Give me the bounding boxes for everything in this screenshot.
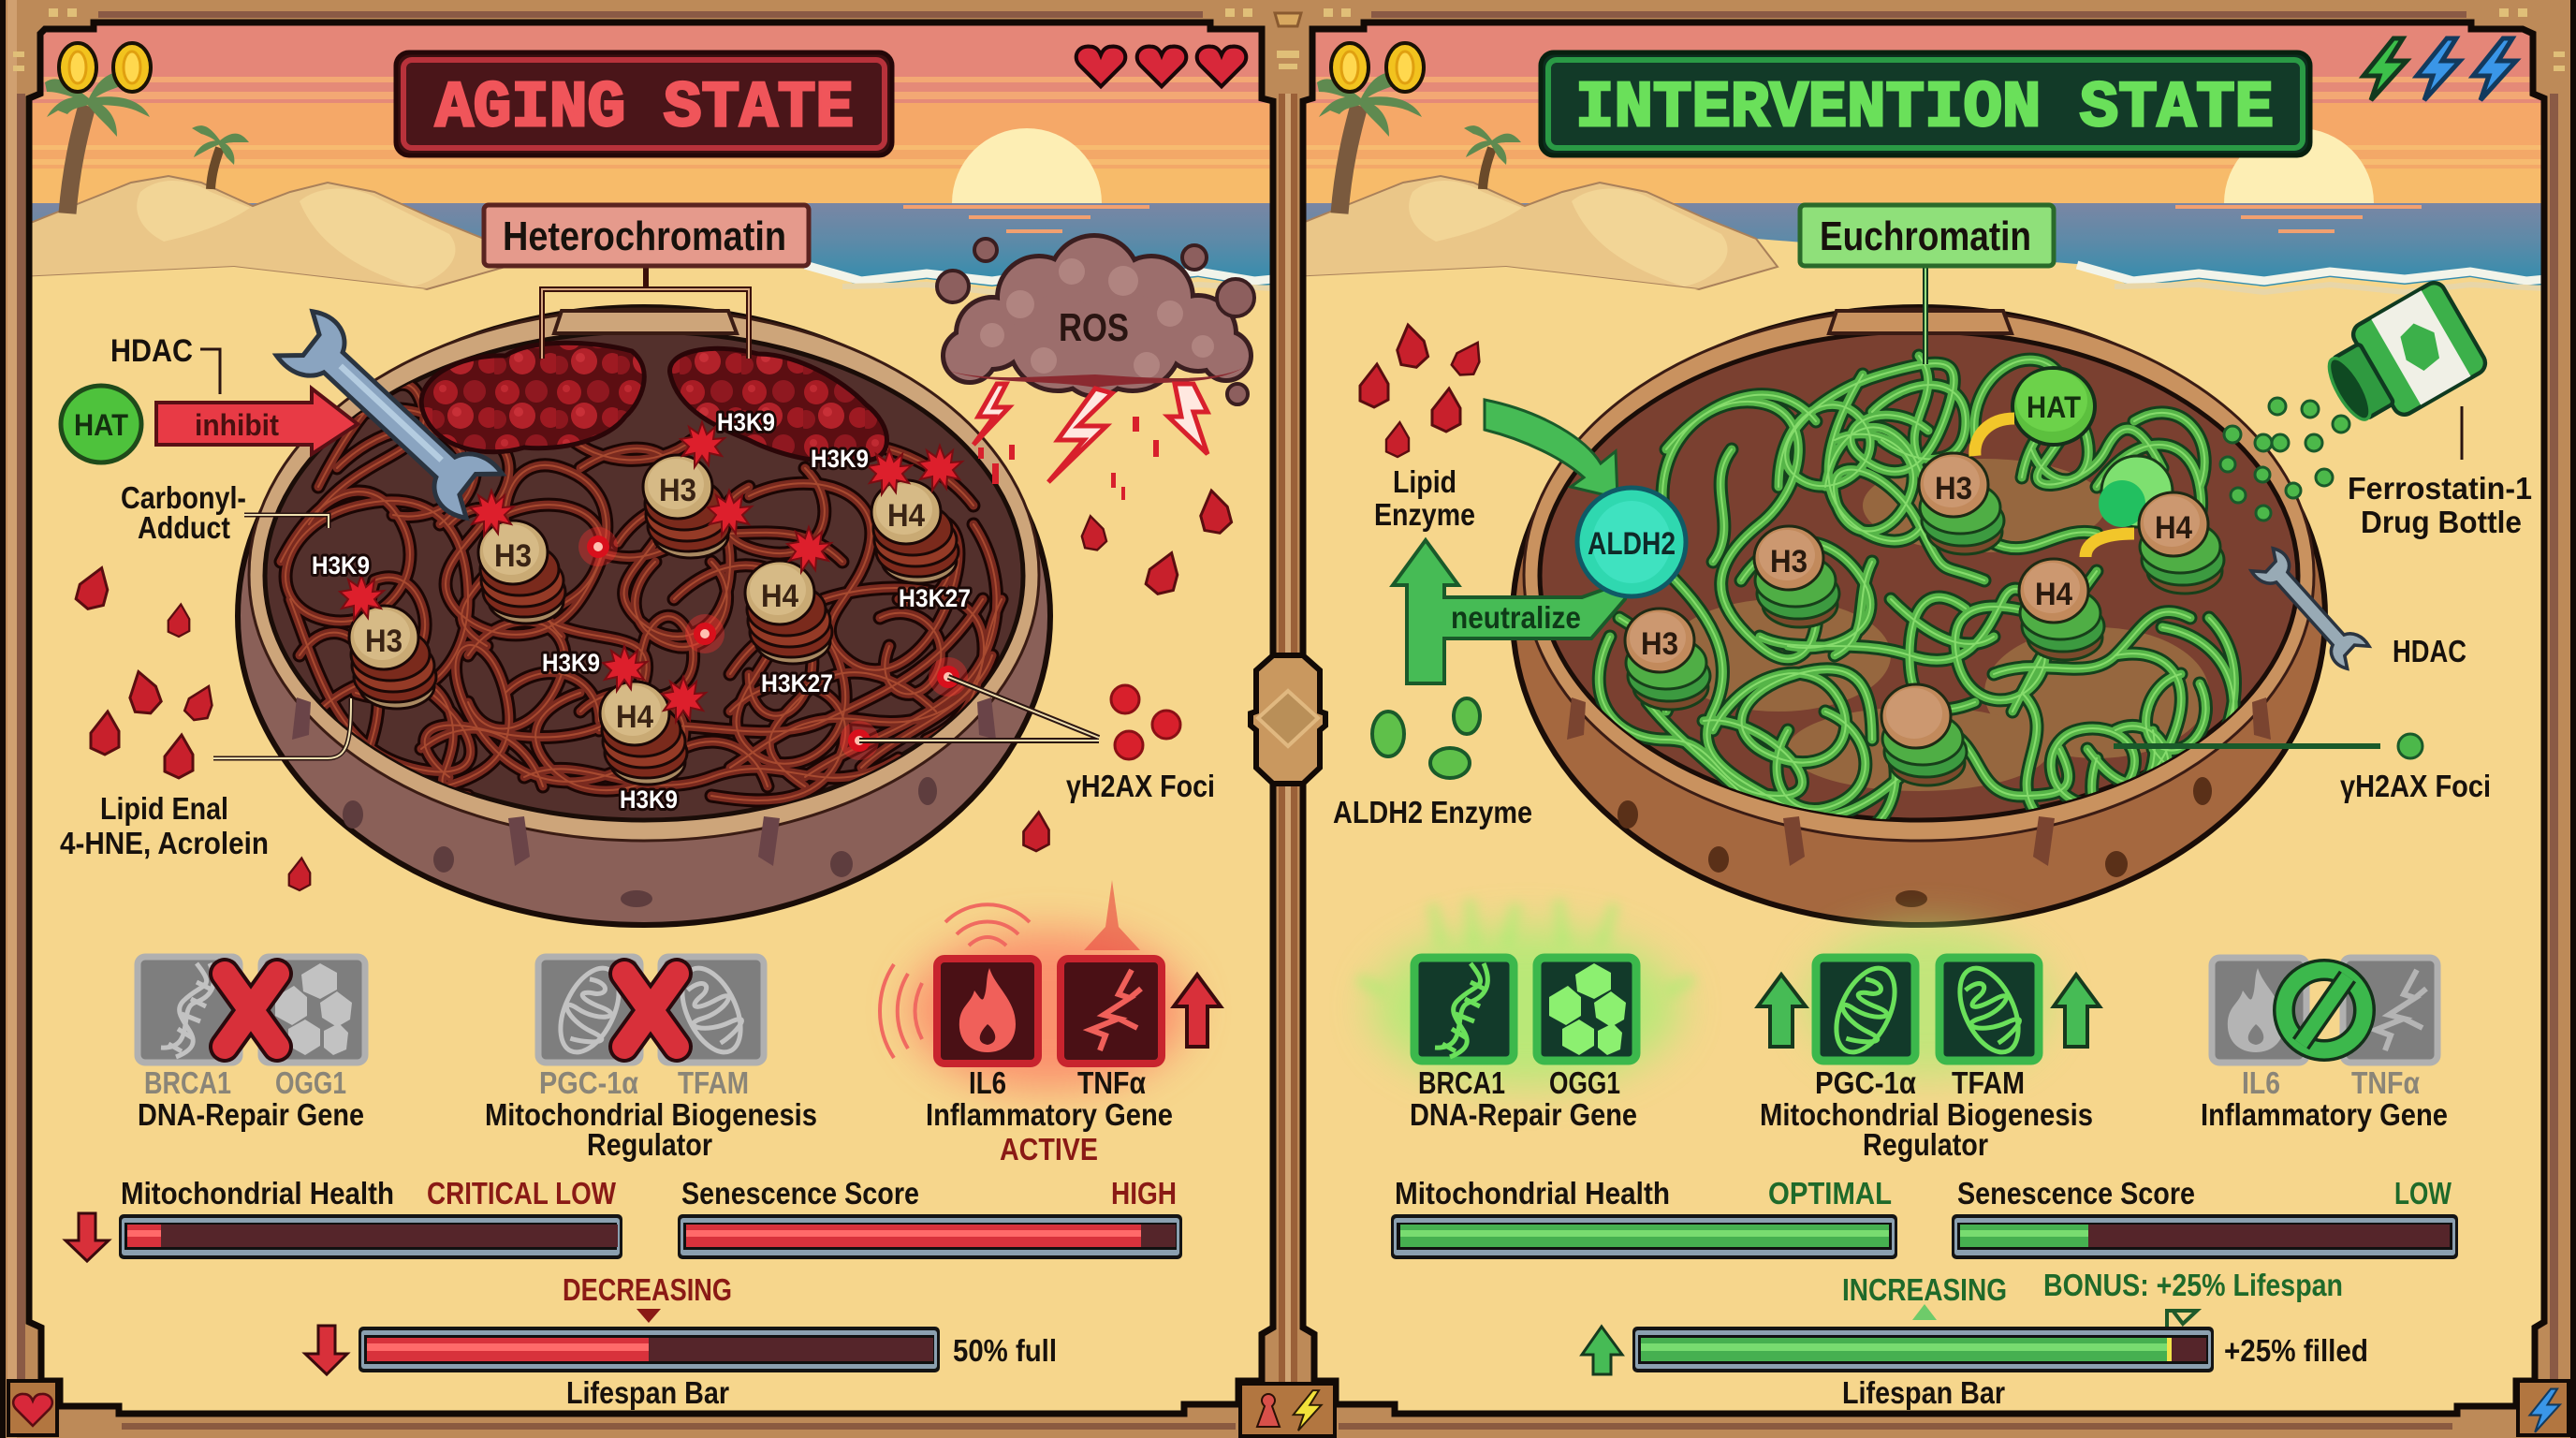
nucleosome: H3: H3 xyxy=(1770,544,1808,580)
panel: intervention state xyxy=(1272,19,2576,1438)
lifespan bar: increasing: +25% filled xyxy=(2224,1333,2368,1368)
stat: mitochondrial health xyxy=(1391,1176,1897,1259)
gene group: mitochondrial biogenesis, active: PGC-1α xyxy=(1815,1065,1916,1100)
lifespan bar: increasing: Lifespan Bar xyxy=(1842,1375,2005,1410)
gamma H2AX foci callout xyxy=(859,677,1215,803)
stat: senescence score xyxy=(1952,1176,2458,1259)
histone mark labels: H3K27 xyxy=(761,669,833,697)
gene group: DNA repair, active: DNA-Repair Gene xyxy=(1410,1097,1637,1132)
corner icon: heart xyxy=(8,1381,57,1435)
ALDH2 enzyme: ALDH2 xyxy=(1588,526,1676,562)
stat: mitochondrial health xyxy=(66,1176,622,1261)
chromatin strands xyxy=(281,384,1002,800)
label: lipid enzyme xyxy=(1374,464,1475,532)
histone mark labels: H3K9 xyxy=(811,445,869,473)
gene group: inflammatory, active: IL6 xyxy=(969,1065,1006,1100)
stat: senescence score xyxy=(678,1176,1182,1259)
label: carbonyl adduct xyxy=(121,480,329,545)
coins xyxy=(59,43,151,92)
nucleosome: H3: H3 xyxy=(659,473,696,508)
chromatin bowl xyxy=(238,307,1050,925)
label: ferrostatin-1 drug bottle xyxy=(2348,406,2532,539)
label: ALDH2 enzyme: ALDH2 Enzyme xyxy=(1333,795,1532,829)
HAT enzyme xyxy=(61,386,141,462)
gene group: mitochondrial biogenesis, active xyxy=(1758,927,2100,1162)
gene group: inflammatory, active: ACTIVE xyxy=(1000,1132,1098,1167)
gamma H2AX foci callout xyxy=(2114,734,2491,803)
connector: euchromatin xyxy=(1923,266,1928,364)
corner icon: blue bolt xyxy=(2518,1381,2569,1435)
histone mark labels: H3K9 xyxy=(620,785,678,814)
wrench: HDAC xyxy=(273,302,505,527)
nucleosome: H4 xyxy=(745,561,832,664)
nucleosome: H3 xyxy=(1754,526,1839,627)
gamma H2AX foci callout: γH2AX Foci xyxy=(1066,769,1215,803)
gene group: DNA repair, active xyxy=(1357,899,1694,1132)
panel: aging state xyxy=(0,19,1310,1438)
lightning and sparks xyxy=(973,384,1208,500)
label: HDAC: HDAC xyxy=(110,333,193,369)
chromatin strands xyxy=(1599,356,2235,835)
gene group: mitochondrial biogenesis, active: Regulator xyxy=(1863,1127,1988,1162)
green enzyme blob xyxy=(2099,456,2173,527)
title: aging state: AGING STATE xyxy=(435,72,854,146)
ROS cloud: ROS xyxy=(1059,305,1129,349)
hearts xyxy=(1076,47,1246,86)
gene group: mitochondrial biogenesis, active: TFAM xyxy=(1952,1065,2025,1100)
nucleosome: H3 xyxy=(1919,453,2004,554)
gene group: inflammatory, active xyxy=(880,880,1221,1167)
nucleosome: H4: H4 xyxy=(616,699,653,735)
nucleosome: H3: H3 xyxy=(365,624,402,659)
lifespan bar: decreasing: 50% full xyxy=(953,1333,1057,1368)
stat: mitochondrial health: CRITICAL LOW xyxy=(427,1176,617,1211)
connector: lipid enal xyxy=(213,698,351,758)
gene group: inflammatory, blocked xyxy=(2201,958,2448,1132)
label: lipid enzyme: Enzyme xyxy=(1374,497,1475,532)
label: lipid enzyme: Lipid xyxy=(1393,464,1456,499)
gene group: inflammatory, blocked: Inflammatory Gene xyxy=(2201,1097,2448,1132)
connector: heterochromatin xyxy=(542,266,749,359)
coins xyxy=(1331,43,1424,92)
histone mark labels: H3K27 xyxy=(899,584,971,612)
gene group: inflammatory, active: TNFα xyxy=(1077,1065,1146,1100)
nucleosome: H3 xyxy=(478,521,565,624)
title: intervention state: INTERVENTION STATE xyxy=(1575,72,2274,146)
label: carbonyl adduct: Carbonyl- xyxy=(121,480,246,515)
stat: senescence score: LOW xyxy=(2394,1176,2452,1211)
damage foci xyxy=(578,527,968,760)
gene group: DNA repair, silenced: OGG1 xyxy=(275,1065,346,1100)
nucleosome: H3: H3 xyxy=(1641,626,1678,662)
nucleosome: H4 xyxy=(600,682,687,785)
gamma H2AX foci callout: γH2AX Foci xyxy=(2340,769,2491,803)
heterochromatin clusters xyxy=(421,343,887,462)
gene group: DNA repair, active: BRCA1 xyxy=(1418,1065,1505,1100)
nucleosome: unlabeled xyxy=(1881,684,1967,785)
drug particles xyxy=(2220,398,2349,521)
arrow: neutralize: neutralize xyxy=(1451,600,1581,635)
center frame ornament xyxy=(1251,655,1325,784)
stat: mitochondrial health: Mitochondrial Health xyxy=(1395,1176,1670,1211)
lipid enal droplets xyxy=(74,488,1234,890)
HAT enzyme xyxy=(2012,368,2095,445)
gene group: mitochondrial biogenesis, active: Mitochondrial Biogenesis xyxy=(1760,1097,2093,1132)
nucleosome: H3: H3 xyxy=(1935,471,1972,506)
beach sunset background xyxy=(0,19,1310,1438)
HAT enzyme: HAT xyxy=(2027,390,2081,424)
lifespan bar: increasing: BONUS: +25% Lifespan xyxy=(2043,1268,2343,1302)
nucleosome: H3: H3 xyxy=(494,538,532,574)
histone mark labels xyxy=(312,408,971,814)
lipid droplets xyxy=(1360,322,1486,457)
gene group: mitochondrial biogenesis, silenced: Regulator xyxy=(587,1127,712,1162)
title: aging state xyxy=(396,52,892,155)
arrow: neutralize xyxy=(1393,540,1629,683)
histone mark labels: H3K9 xyxy=(717,408,775,436)
stat: mitochondrial health: Mitochondrial Health xyxy=(121,1176,394,1211)
nucleosome: H4: H4 xyxy=(887,498,925,534)
nucleosome: H4 xyxy=(871,480,959,583)
lifespan bar: decreasing: Lifespan Bar xyxy=(566,1375,729,1410)
lifespan bar: decreasing xyxy=(305,1272,1057,1410)
gene group: mitochondrial biogenesis, silenced: Mitochondrial Biogenesis xyxy=(485,1097,817,1132)
label: euchromatin xyxy=(1800,205,2054,266)
gene group: mitochondrial biogenesis, silenced xyxy=(485,957,817,1162)
ROS cloud xyxy=(937,238,1254,404)
gene group: DNA repair, silenced: BRCA1 xyxy=(144,1065,231,1100)
label: lipid enal: Lipid Enal xyxy=(100,791,228,826)
nucleosome: H4: H4 xyxy=(761,579,798,614)
lifespan bar: increasing: INCREASING xyxy=(1842,1272,2007,1307)
gene group: mitochondrial biogenesis, silenced: TFAM xyxy=(678,1065,749,1100)
title: intervention state xyxy=(1541,52,2310,155)
beach sunset background xyxy=(1272,19,2576,1438)
label: ferrostatin-1 drug bottle: Drug Bottle xyxy=(2361,505,2522,539)
label: heterochromatin: Heterochromatin xyxy=(503,213,786,259)
curved arrow into ALDH2 xyxy=(1485,400,1617,498)
stat: senescence score: HIGH xyxy=(1111,1176,1177,1211)
label: lipid enal xyxy=(60,791,269,860)
nucleosome: H4 xyxy=(2139,492,2224,594)
gene group: DNA repair, silenced: DNA-Repair Gene xyxy=(138,1097,364,1132)
label: heterochromatin xyxy=(484,205,809,266)
gene group: inflammatory, blocked: TNFα xyxy=(2351,1065,2420,1100)
lifespan bar: increasing xyxy=(1582,1268,2368,1410)
ALDH2 enzyme xyxy=(1577,488,1686,596)
label: HDAC: HDAC xyxy=(2393,634,2466,668)
HAT enzyme: HAT xyxy=(74,408,128,442)
label: HDAC xyxy=(110,333,220,394)
energy bolts xyxy=(2364,38,2516,100)
nucleosome: H3 xyxy=(349,606,436,709)
stat: mitochondrial health: OPTIMAL xyxy=(1768,1176,1892,1211)
gene group: DNA repair, silenced xyxy=(138,957,365,1132)
carbonyl adduct stars xyxy=(340,422,962,722)
nucleosome: H3 xyxy=(1625,609,1710,710)
yellow acetylation arrows xyxy=(1975,418,2134,557)
arrow: inhibit xyxy=(156,389,358,454)
stat: senescence score: Senescence Score xyxy=(1957,1176,2195,1211)
stat: senescence score: Senescence Score xyxy=(681,1176,919,1211)
gene group: inflammatory, blocked: IL6 xyxy=(2242,1065,2280,1100)
histone mark labels: H3K9 xyxy=(312,551,370,580)
nucleosome: H4: H4 xyxy=(2035,577,2072,612)
wrench: HDAC xyxy=(2249,544,2371,673)
chromatin bowl xyxy=(1513,307,2325,925)
nucleosome: H4: H4 xyxy=(2155,510,2192,546)
ALDH2 enzyme pellets xyxy=(1372,698,1480,778)
nucleosome: H3 xyxy=(643,455,730,558)
nucleosome: H4 xyxy=(2019,559,2104,660)
gene group: inflammatory, active: Inflammatory Gene xyxy=(926,1097,1173,1132)
corner icon: pawn and bolt xyxy=(1240,1384,1335,1436)
label: euchromatin: Euchromatin xyxy=(1820,213,2031,259)
label: ferrostatin-1 drug bottle: Ferrostatin-1 xyxy=(2348,471,2532,506)
drug bottle xyxy=(2314,279,2489,439)
gene group: mitochondrial biogenesis, silenced: PGC-1α xyxy=(539,1065,638,1100)
gene group: DNA repair, active: OGG1 xyxy=(1549,1065,1620,1100)
label: carbonyl adduct: Adduct xyxy=(138,510,230,545)
histone mark labels: H3K9 xyxy=(542,649,600,677)
label: lipid enal: 4-HNE, Acrolein xyxy=(60,826,269,860)
lifespan bar: decreasing: DECREASING xyxy=(563,1272,732,1307)
arrow: inhibit: inhibit xyxy=(195,408,279,442)
